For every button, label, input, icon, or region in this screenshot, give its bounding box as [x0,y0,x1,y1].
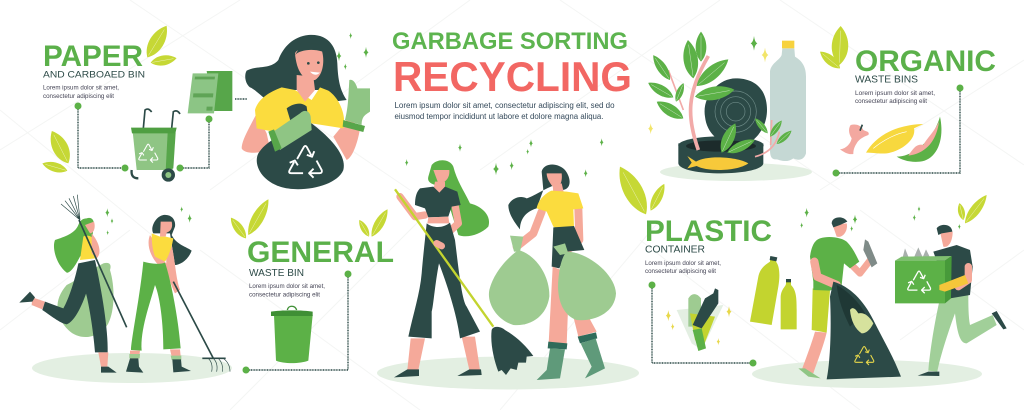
panel: paper heading: Lorem ipsum dolor sit amet, [43,84,119,92]
panel: plastic heading: CONTAINER [645,244,705,256]
main title [392,28,632,121]
figure: woman raking in green trousers [126,206,230,373]
icon: paper sheets [188,71,232,113]
panel: general heading: GENERAL [247,236,394,269]
ground ellipse: organic [660,163,812,181]
panel: organic heading [855,45,996,105]
icon: paper leaves [41,22,177,175]
panel: plastic heading: consectetur adipiscing elit [645,268,716,275]
ground ellipse: left pair [32,353,232,383]
icon: general leaves [227,196,392,241]
icon: general waste bin [271,306,313,363]
panel: organic heading: Lorem ipsum dolor sit amet, [855,90,935,97]
panel: plastic heading: PLASTIC [645,215,772,248]
figure: woman with broom [394,160,533,377]
icon: cup with plastic bottles [666,288,731,351]
panel: general heading: consectetur adipiscing elit [249,292,320,298]
panel: paper heading: PAPER [43,40,143,73]
icon: paper bin [131,109,180,182]
figure: woman with rake and bag running [19,195,127,373]
connector: general [242,270,352,374]
panel: organic heading: WASTE BINS [855,74,918,86]
panel: paper heading [43,40,145,100]
figure: woman with black bag, thumbs up [242,32,370,189]
icon: lime plastic bottles [750,256,797,329]
connector: plastic [648,282,756,366]
icon: plastic leaves [612,162,991,226]
illustration: tin can, lid, plants and plastic bottle [646,32,806,173]
panel: plastic heading [645,215,772,275]
panel: organic heading: consectetur adipiscing elit [855,98,927,105]
ground ellipse: centre pair [377,356,639,390]
main title: Lorem ipsum dolor sit amet, consectetur adipiscing elit, sed do [394,101,615,110]
figure: man filling black bag with bottles [798,208,901,379]
panel: paper heading: consectetur adipiscing elit [43,93,114,100]
panel: general heading: WASTE BIN [249,268,304,279]
sparkles: centre [405,138,603,177]
connector: organic [832,84,964,176]
ground ellipse: plastic men [752,360,982,388]
main title: RECYCLING [393,53,632,100]
figure: man running with recycling box [895,206,1007,376]
connector: paper [74,99,247,172]
panel: plastic heading: Lorem ipsum dolor sit amet, [645,260,721,267]
figure: woman carrying two garbage bags [489,165,616,380]
main title: GARBAGE SORTING [392,28,628,55]
panel: paper heading: AND CARBOAED BIN [43,70,145,80]
icon: organic leaves [817,26,849,72]
panel: general heading: Lorem ipsum dolor sit amet, [249,283,325,290]
panel: general heading [247,236,394,298]
icon: organic waste apple core, banana peel, melon rind [840,117,941,162]
main title: eiusmod tempor incididunt ut labore et dolore magna aliqua. [394,112,604,121]
panel: organic heading: ORGANIC [855,45,996,78]
